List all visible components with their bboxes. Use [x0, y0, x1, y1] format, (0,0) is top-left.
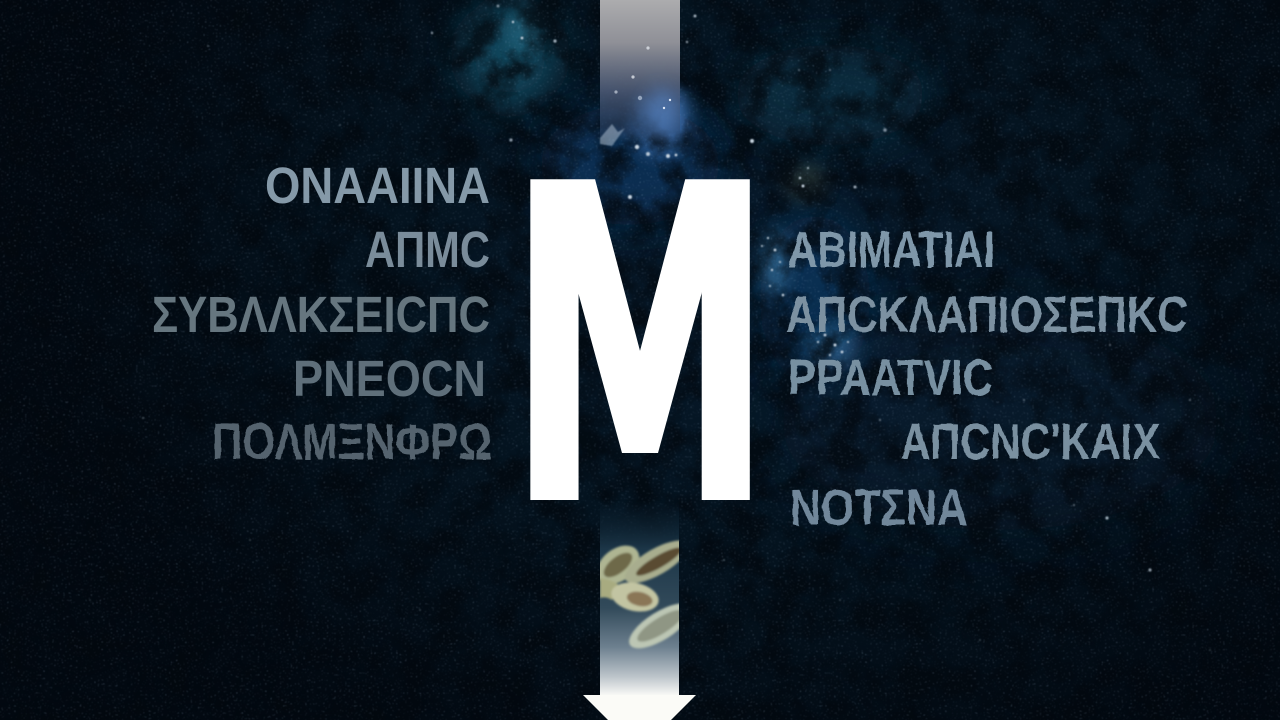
right column of text labels	[786, 221, 1188, 536]
left column of text labels: PNEOCN	[293, 350, 486, 407]
left column of text labels: ΑΠΜC	[365, 221, 490, 278]
arrow: top segment of vertical bar	[600, 0, 680, 146]
arrow: bottom segment with image of bacteria and arrowhead	[600, 509, 679, 695]
large letter M: M	[506, 93, 775, 605]
bacteria illustration	[600, 539, 679, 650]
left column of text labels: ΟΝΑΑΙΙΝΑ	[265, 157, 490, 214]
right column of text labels: ΑΒΙΜΑΤΙΑΙ	[788, 221, 995, 278]
right column of text labels: ΝΟΤΣΝΑ	[790, 479, 968, 536]
left column of text labels	[152, 157, 492, 470]
right column of text labels: ΑΠCΚΛΑΠΙΟΣΕΠΚC	[786, 286, 1188, 343]
left column of text labels: ΣΥΒΛΛΚΣΕΙCΠC	[152, 286, 490, 343]
nebula clouds	[462, 3, 1220, 530]
arrowhead	[583, 695, 696, 720]
left column of text labels: ΠΟΛΜΞΝΦΡΩ	[212, 413, 492, 470]
right column of text labels: ΑΠCNC'ΚΑΙΧ	[900, 413, 1160, 470]
right column of text labels: ΡΡΑΑΤVIC	[788, 349, 993, 406]
